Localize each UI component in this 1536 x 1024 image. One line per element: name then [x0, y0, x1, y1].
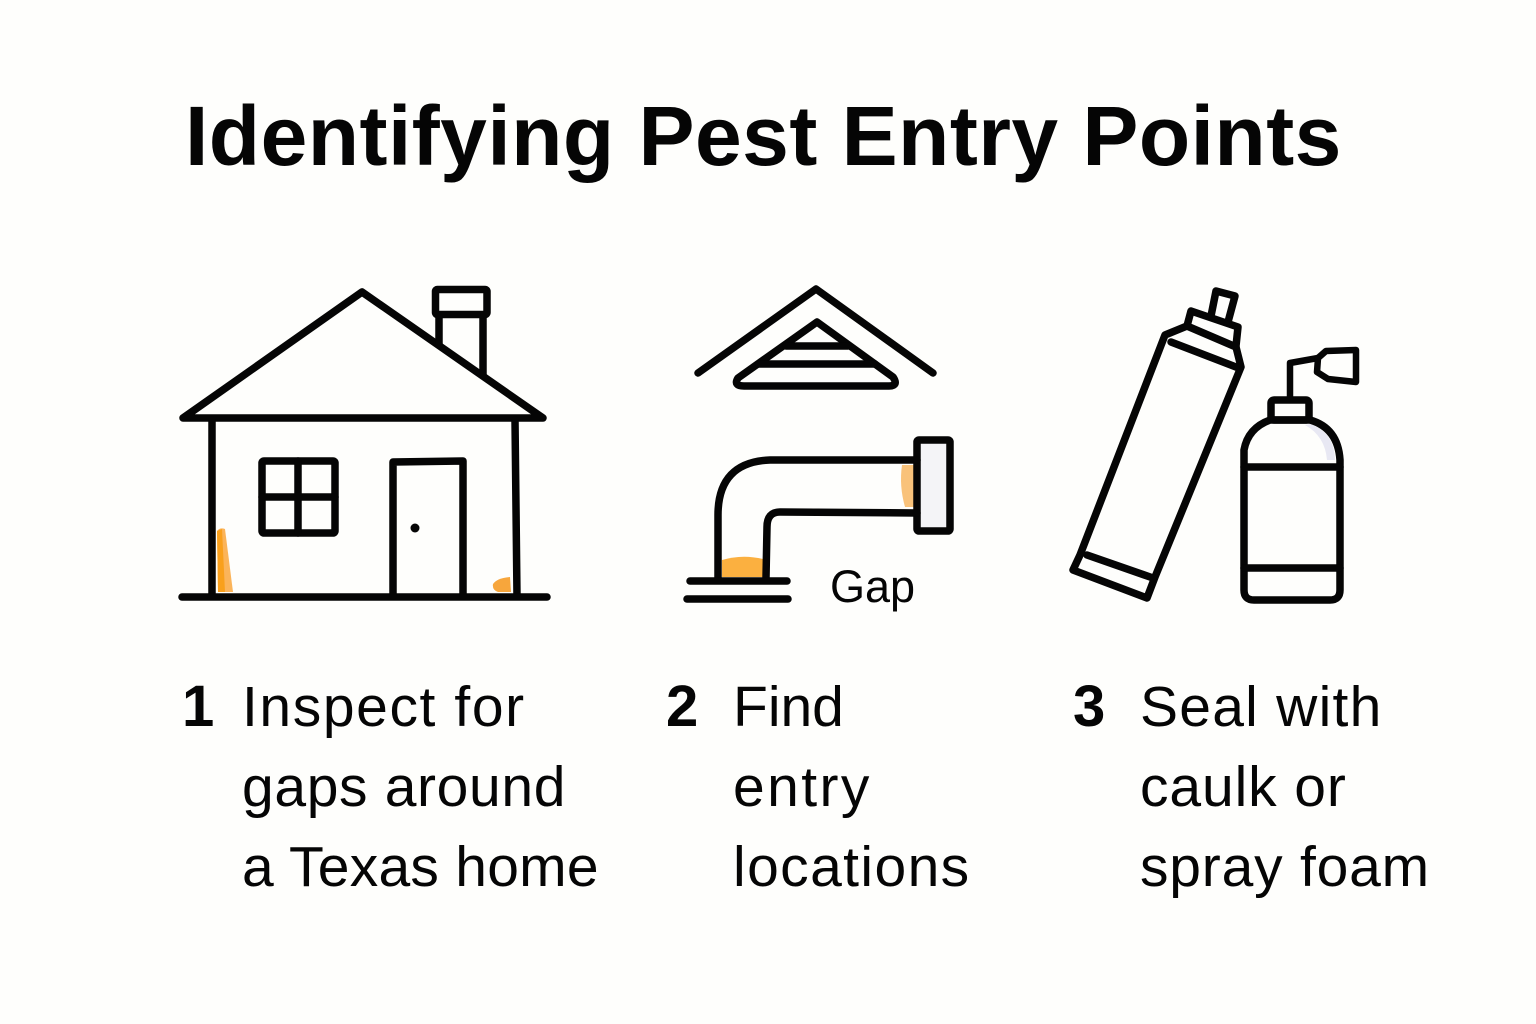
step 3 text: spray foam: [1140, 835, 1430, 899]
step number 2: 2: [666, 674, 698, 739]
step 3 text: [1140, 675, 1430, 899]
step 2 text: entry: [733, 755, 872, 819]
step 2 text: locations: [733, 835, 971, 899]
step number 1: 1: [182, 674, 214, 739]
step 3 text: caulk or: [1140, 755, 1347, 819]
step 3: [1073, 674, 1430, 899]
step 1 text: gaps around: [242, 755, 566, 819]
step 3 text: Seal with: [1140, 675, 1383, 739]
step 2 text: Find: [733, 675, 844, 739]
step 2: [666, 674, 971, 899]
step 1 text: Inspect for: [242, 675, 526, 739]
step 1 text: [242, 675, 599, 899]
title: Identifying Pest Entry Points: [185, 89, 1342, 183]
step number 3: 3: [1073, 674, 1105, 739]
icon: house: [182, 290, 547, 597]
icon: pipe with gap: [687, 440, 950, 599]
icon: spray foam can: [1244, 350, 1356, 600]
gap label: Gap: [830, 561, 915, 612]
icon: roof vent: [698, 289, 933, 386]
step 2 text: [733, 675, 971, 899]
step 1 text: a Texas home: [242, 835, 599, 899]
icon: caulk tube: [1073, 291, 1241, 598]
step 1: [182, 674, 599, 899]
